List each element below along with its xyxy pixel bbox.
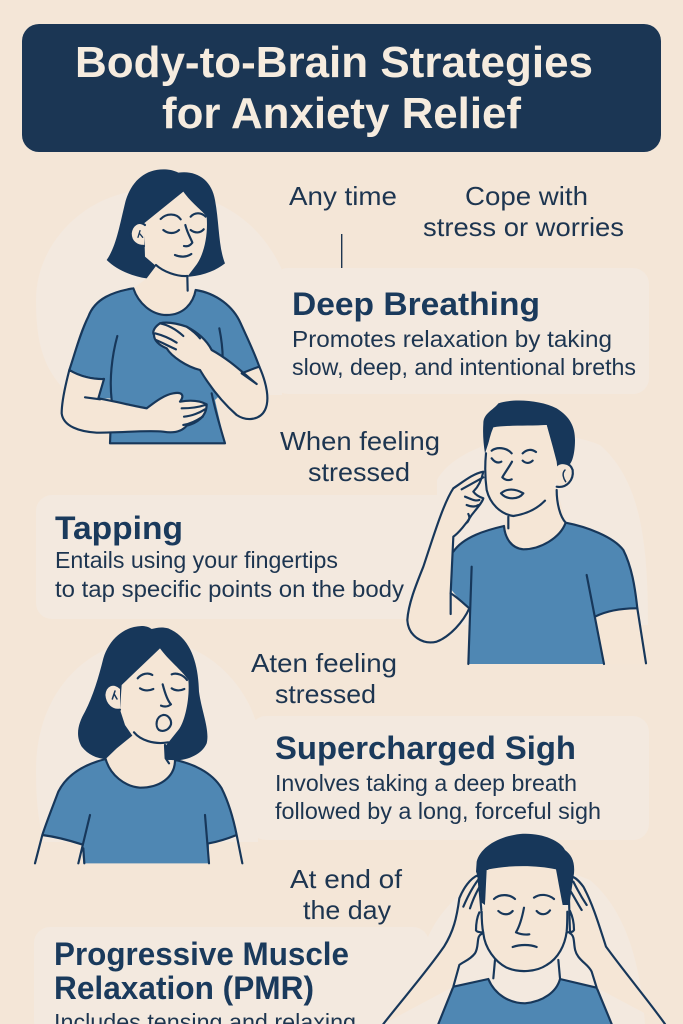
label: when feeling stressed [280, 426, 440, 487]
description: supercharged sigh: Involves taking a deep breath [275, 770, 577, 796]
description: deep breathing: Promotes relaxation by taking [292, 326, 612, 352]
label: cope with stress or worries: Cope with [465, 181, 588, 211]
backdrop blob: figure 2 [437, 435, 648, 625]
illustration: man massaging temples [383, 834, 665, 1024]
heading: progressive muscle relaxation [54, 936, 349, 1006]
heading: supercharged sigh: Supercharged Sigh [275, 730, 576, 766]
description: tapping: Entails using your fingertips [55, 547, 338, 573]
label: cope with stress or worries: stress or worries [423, 212, 624, 242]
backdrop blob: figure 1 [36, 190, 282, 395]
heading: deep breathing: Deep Breathing [292, 286, 540, 322]
description: supercharged sigh [275, 770, 601, 824]
panel: supercharged sigh [250, 716, 649, 840]
backdrop blob: figure 3 [36, 640, 258, 842]
panel: tapping [36, 495, 456, 619]
label: at end of the day: At end of [290, 864, 403, 894]
heading: tapping: Tapping [55, 510, 183, 546]
title banner [22, 24, 661, 152]
description: tapping [55, 547, 405, 602]
label: aten feeling stressed: Aten feeling [251, 648, 397, 678]
label: when feeling stressed: When feeling [280, 426, 440, 456]
description: supercharged sigh: followed by a long, forceful sigh [275, 798, 601, 824]
label: when feeling stressed: stressed [308, 457, 410, 487]
label: any time: Any time [289, 181, 397, 211]
backdrop blob: figure 4 [420, 869, 645, 1024]
title banner: for Anxiety Relief [162, 89, 521, 138]
label: at end of the day [290, 864, 403, 925]
label: aten feeling stressed [251, 648, 397, 709]
connector line [341, 234, 342, 268]
heading: progressive muscle relaxation: Relaxation (PMR) [54, 970, 314, 1006]
illustration: man tapping his face [407, 401, 646, 664]
heading: progressive muscle relaxation: Progressive Muscle [54, 936, 349, 972]
label: aten feeling stressed: stressed [275, 679, 376, 709]
description: tapping: to tap specific points on the body [55, 576, 405, 602]
panel: deep breathing [272, 268, 649, 394]
illustration: woman breathing with hands on chest and belly [62, 169, 267, 443]
label: at end of the day: the day [303, 895, 391, 925]
title banner: Body-to-Brain Strategies [75, 38, 593, 87]
description: deep breathing: slow, deep, and intentional breths [292, 354, 636, 380]
label: cope with stress or worries [423, 181, 624, 242]
panel: progressive muscle relaxation [34, 927, 429, 1024]
description: deep breathing [292, 326, 636, 380]
illustration: woman sighing [35, 626, 242, 863]
